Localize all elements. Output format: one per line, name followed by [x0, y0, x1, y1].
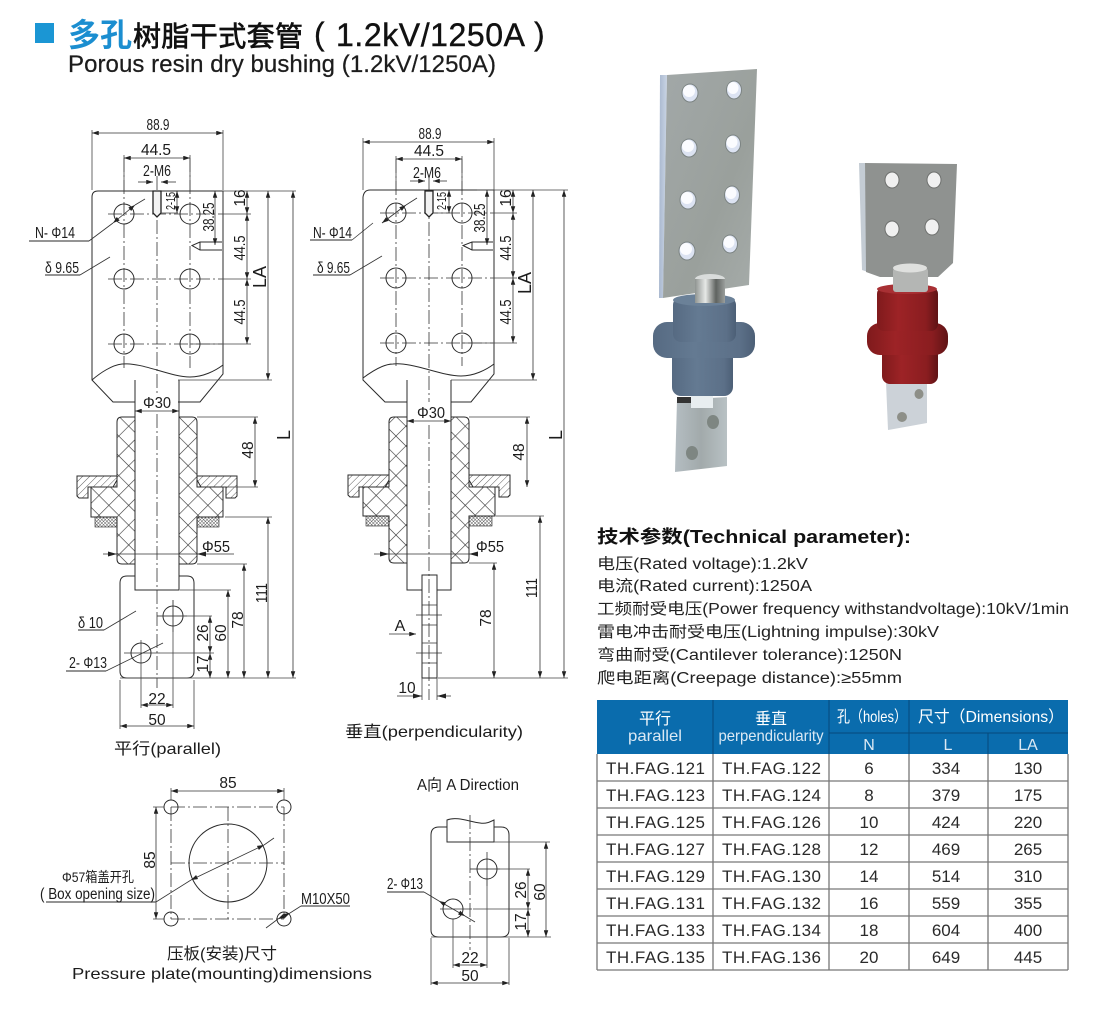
- table rows: 6: [864, 759, 874, 778]
- caption: pressure plate: [72, 945, 372, 983]
- parameters list: [597, 555, 1069, 687]
- dimension labels: A: [395, 618, 406, 635]
- dimension labels: 2-15: [434, 192, 449, 210]
- title: ): [534, 16, 545, 52]
- table rows: TH.FAG.134: [722, 921, 821, 940]
- dimension labels: 44.5: [232, 300, 249, 324]
- title: 1.2kV/1250A: [336, 17, 526, 53]
- dimension labels: 38.25: [472, 204, 489, 232]
- caption: pressure plate: 压板(安装)尺寸: [167, 945, 277, 963]
- plate dimensions: ( Box opening size): [40, 886, 155, 903]
- table rows: TH.FAG.123: [606, 786, 705, 805]
- leader callouts: δ 9.65: [45, 260, 79, 277]
- table header: parallel: [628, 728, 682, 745]
- dimension labels: 48: [240, 441, 257, 459]
- parameters list: 电压(Rated voltage):1.2kV: [597, 555, 809, 573]
- leader callouts: 2- Φ13: [69, 655, 107, 672]
- body section: [348, 380, 510, 700]
- plate dimensions: 85: [142, 851, 159, 869]
- body section: [77, 380, 237, 688]
- dimension labels: Φ55: [202, 539, 230, 556]
- technical parameters: [597, 526, 1069, 687]
- table grid: [597, 754, 1068, 970]
- dimension labels: 50: [148, 712, 166, 729]
- title square icon: [35, 23, 54, 43]
- dimension labels: 88.9: [418, 126, 442, 143]
- table rows: 20: [860, 948, 878, 967]
- plate dimensions: M10X50: [301, 891, 350, 908]
- table rows: 8: [864, 786, 874, 805]
- plate holes and centre lines: [164, 800, 291, 926]
- blade outline: [431, 815, 509, 950]
- parameters list: 电流(Rated current):1250A: [597, 577, 813, 595]
- table rows: 220: [1014, 813, 1042, 832]
- lower blade: [675, 396, 727, 472]
- upper plate: [659, 69, 757, 298]
- dimension labels: L: [546, 430, 566, 440]
- table rows: 424: [932, 813, 960, 832]
- A direction dimensions: 60: [532, 883, 549, 901]
- dimension labels: 10: [398, 680, 416, 697]
- table rows: 130: [1014, 759, 1042, 778]
- table rows: 334: [932, 759, 960, 778]
- dimension labels: 17: [195, 655, 212, 673]
- table rows: 400: [1014, 921, 1042, 940]
- drawing: pressure plate mounting dimensions: [40, 775, 372, 983]
- table rows: 14: [860, 867, 878, 886]
- table header: 垂直: [755, 710, 787, 728]
- A direction dimensions: 2- Φ13: [387, 876, 423, 893]
- table header: N: [863, 737, 875, 754]
- table header: 平行: [639, 710, 671, 728]
- dimension labels: 111: [254, 583, 271, 603]
- dimension lines: [363, 138, 568, 700]
- resin body: [867, 284, 948, 384]
- table rows: TH.FAG.132: [722, 894, 821, 913]
- A direction dimensions: 26: [513, 881, 530, 899]
- table rows: TH.FAG.130: [722, 867, 821, 886]
- leader callouts: N- Φ14: [313, 225, 352, 242]
- plate dimensions: [40, 775, 350, 928]
- table rows: TH.FAG.126: [722, 813, 821, 832]
- leader callouts: [310, 198, 417, 277]
- table rows: 469: [932, 840, 960, 859]
- dimension labels: 78: [478, 609, 495, 627]
- table rows: [606, 759, 1042, 967]
- dimension labels: 2-M6: [143, 163, 171, 180]
- leader callouts: [29, 199, 163, 672]
- dimension labels: LA: [515, 272, 535, 294]
- lower blade: [886, 382, 927, 430]
- table rows: TH.FAG.133: [606, 921, 705, 940]
- table rows: 559: [932, 894, 960, 913]
- table header: [597, 700, 1068, 754]
- table rows: 445: [1014, 948, 1042, 967]
- table header: LA: [1018, 737, 1038, 754]
- table rows: 355: [1014, 894, 1042, 913]
- table rows: TH.FAG.124: [722, 786, 821, 805]
- resin body: [653, 279, 755, 396]
- dimension labels: 44.5: [141, 142, 171, 159]
- dimension labels: 26: [195, 624, 212, 642]
- drawing: parallel terminal bushing: [29, 117, 296, 758]
- dimension labels: 78: [230, 611, 247, 629]
- stud: [695, 274, 725, 309]
- parameters list: 雷电冲击耐受电压(Lightning impulse):30kV: [597, 623, 940, 641]
- table rows: 16: [860, 894, 878, 913]
- A direction dimensions: 17: [513, 913, 530, 931]
- drawing: perpendicular terminal bushing: [310, 126, 568, 741]
- title: [35, 10, 545, 78]
- dimension labels: 88.9: [146, 117, 170, 134]
- dimension labels: Φ30: [143, 395, 171, 412]
- parameters list: 爬电距离(Creepage distance):≥55mm: [597, 669, 902, 687]
- dimension labels: Φ55: [476, 539, 504, 556]
- table rows: TH.FAG.127: [606, 840, 705, 859]
- dimension lines: [92, 130, 296, 729]
- table rows: 649: [932, 948, 960, 967]
- Chinese title: 多孔: [68, 10, 132, 56]
- table header: L: [944, 737, 953, 754]
- table header: perpendicularity: [718, 728, 824, 745]
- parameters list: 弯曲耐受(Cantilever tolerance):1250N: [597, 646, 902, 664]
- dimension labels: LA: [250, 266, 270, 288]
- table rows: TH.FAG.122: [722, 759, 821, 778]
- plate dimensions: Φ57箱盖开孔: [62, 869, 134, 885]
- dimension labels: 22: [148, 691, 166, 708]
- table rows: 265: [1014, 840, 1042, 859]
- leader callouts: δ 10: [78, 615, 103, 632]
- leader callouts: N- Φ14: [35, 225, 75, 242]
- dimension labels: 16: [232, 189, 249, 207]
- table rows: TH.FAG.125: [606, 813, 705, 832]
- A direction heading: A向 A Direction: [417, 776, 519, 794]
- title: (: [314, 16, 325, 52]
- table header: 孔（holes）: [837, 708, 907, 726]
- table rows: 18: [860, 921, 878, 940]
- top plate outline: [92, 158, 223, 402]
- leader callouts: δ 9.65: [317, 260, 350, 277]
- table rows: 310: [1014, 867, 1042, 886]
- dimension labels: 2-15: [163, 192, 178, 210]
- A direction dimensions: [387, 842, 551, 985]
- table rows: 175: [1014, 786, 1042, 805]
- plate dimensions: 85: [219, 775, 237, 792]
- top plate outline: [363, 159, 494, 402]
- table rows: 10: [860, 813, 878, 832]
- drawing: A direction view: [387, 776, 551, 985]
- dimension labels: 111: [524, 578, 541, 598]
- table rows: 379: [932, 786, 960, 805]
- A direction dimensions: 50: [461, 968, 479, 985]
- table rows: TH.FAG.136: [722, 948, 821, 967]
- table rows: 12: [860, 840, 878, 859]
- table rows: TH.FAG.129: [606, 867, 705, 886]
- photo: red bushing: [859, 163, 957, 430]
- photo: blue bushing: [653, 69, 757, 472]
- caption: parallel: 平行(parallel): [114, 740, 221, 758]
- dimension labels: 16: [498, 189, 515, 207]
- dimension labels: [141, 117, 294, 729]
- table rows: 604: [932, 921, 960, 940]
- title: 树脂干式套管: [133, 15, 303, 55]
- parameters heading: 技术参数(Technical parameter):: [597, 526, 911, 547]
- dimension labels: 2-M6: [413, 165, 441, 182]
- A direction dimensions: 22: [461, 950, 479, 967]
- dimension labels: 44.5: [232, 236, 249, 260]
- caption: perpendicularity: 垂直(perpendicularity): [345, 723, 523, 741]
- table header: 尺寸（Dimensions）: [918, 708, 1064, 726]
- dimension labels: 44.5: [498, 236, 515, 260]
- caption: pressure plate: Pressure plate(mounting)dimensions: [72, 966, 372, 983]
- dimension labels: 60: [213, 624, 230, 642]
- upper plate: [859, 163, 957, 277]
- dimension labels: 44.5: [498, 300, 515, 324]
- dimensions table: [597, 700, 1068, 970]
- table rows: TH.FAG.131: [606, 894, 705, 913]
- dimension labels: 44.5: [414, 143, 444, 160]
- dimension labels: [395, 126, 566, 697]
- table rows: 514: [932, 867, 960, 886]
- dimension labels: L: [274, 430, 294, 440]
- dimension labels: 38.25: [201, 202, 218, 232]
- English title: Porous resin dry bushing (1.2kV/1250A): [68, 51, 496, 78]
- table rows: TH.FAG.128: [722, 840, 821, 859]
- table rows: TH.FAG.121: [606, 759, 705, 778]
- parameters list: 工频耐受电压(Power frequency withstandvoltage):10kV/1min: [597, 600, 1069, 618]
- stud: [893, 264, 928, 292]
- dimension labels: Φ30: [417, 405, 445, 422]
- dimension labels: 48: [511, 443, 528, 461]
- table rows: TH.FAG.135: [606, 948, 705, 967]
